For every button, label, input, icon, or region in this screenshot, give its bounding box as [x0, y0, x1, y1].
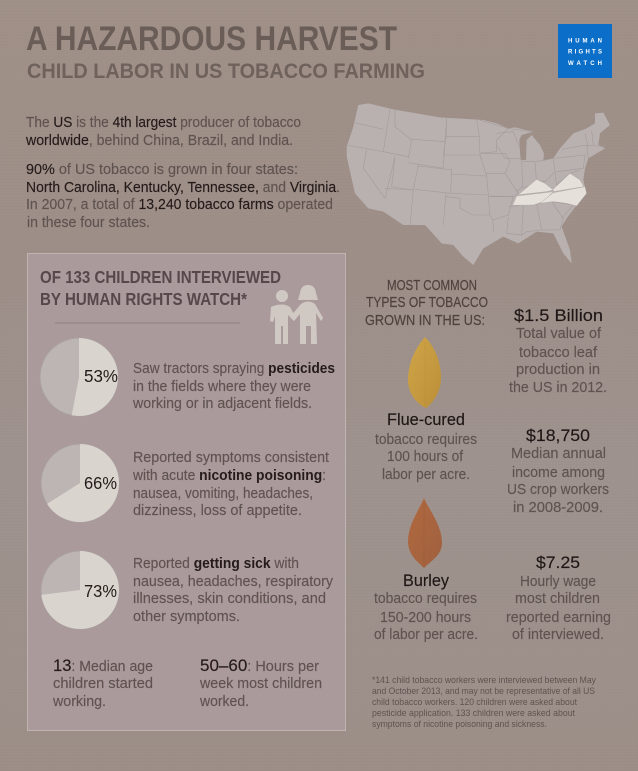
pie chart: 53%: 53%	[84, 366, 118, 386]
heading: tobacco types: TYPES OF TOBACCO	[366, 295, 488, 311]
text: flue-cured: tobacco requires	[375, 432, 477, 448]
stat: hours per week: week most children	[199, 676, 322, 692]
stat: hourly wage: $7.25	[536, 553, 580, 572]
stat: total value: $1.5 Billion	[514, 306, 603, 325]
footnote: *141 child tobacco workers were interviewed between May	[372, 675, 596, 686]
footnote: pesticide application. 133 children were asked about	[372, 708, 575, 719]
pie chart: 73%: 73%	[84, 581, 117, 601]
subtitle: CHILD LABOR IN US TOBACCO FARMING	[27, 60, 425, 83]
stat: median age: children started	[53, 676, 153, 692]
stat: hours per week: worked.	[199, 694, 249, 710]
text: nicotine poisoning	[132, 450, 329, 519]
stat: median income: income among	[512, 465, 605, 481]
highlighted states: Kentucky, Tennessee, Virginia, North Carolina	[513, 173, 587, 206]
footnote: child tobacco workers. 120 children were asked about	[372, 697, 577, 708]
text: getting sick: illnesses, skin conditions, and	[133, 591, 326, 607]
stat: median income: $18,750	[526, 426, 590, 445]
text: nicotine poisoning: Reported symptoms consistent	[133, 450, 329, 466]
intro text: four states: 90% of US tobacco is grown in four states:	[26, 162, 298, 178]
logo: Human Rights Watch	[558, 24, 612, 78]
text: getting sick: other symptoms.	[133, 609, 240, 625]
text: burley: tobacco requires	[374, 591, 477, 607]
stat: median age: 13: Median age	[53, 656, 153, 675]
stat: total value: production in	[516, 362, 600, 378]
stat: hours per week: 50–60: Hours per	[200, 656, 319, 675]
intro text: four states	[26, 162, 340, 231]
stat: median age: working.	[52, 694, 106, 710]
stat: hourly wage	[506, 553, 611, 643]
panel heading: BY HUMAN RIGHTS WATCH*	[40, 289, 247, 309]
footnote	[372, 675, 596, 730]
intro text: four states: In 2007, a total of 13,240 tobacco farms operated	[26, 197, 333, 213]
intro text: US production rank: The US is the 4th largest producer of tobacco	[26, 115, 301, 131]
text: flue-cured: 100 hours of	[387, 449, 464, 465]
text: flue-cured	[375, 410, 477, 483]
pie chart: 73%	[41, 551, 119, 629]
pie chart: 53%	[40, 338, 118, 416]
stat: hourly wage: reported earning	[506, 610, 611, 626]
stat: median income: Median annual	[511, 446, 606, 462]
stat: total value: the US in 2012.	[509, 380, 607, 396]
icon: burley leaf	[408, 498, 442, 568]
text: burley: Burley	[403, 571, 449, 590]
text: nicotine poisoning: with acute nicotine poisoning:	[132, 468, 326, 484]
logo: Human Rights Watch: WATCH	[568, 61, 602, 67]
heading: tobacco types: GROWN IN THE US:	[365, 313, 485, 329]
logo: Human Rights Watch: RIGHTS	[568, 50, 602, 56]
intro text: four states: North Carolina, Kentucky, Tennessee, and Virginia.	[26, 180, 340, 196]
footnote: symptoms of nicotine poisoning and sickness.	[372, 719, 547, 730]
stat: total value	[509, 306, 607, 396]
text: burley	[374, 571, 478, 643]
stat: median income: in 2008-2009.	[513, 500, 603, 516]
text: burley: of labor per acre.	[374, 627, 478, 643]
heading: tobacco types: MOST COMMON	[387, 278, 477, 294]
stat: median age	[52, 656, 153, 710]
stat: median income	[507, 426, 609, 516]
text: pesticides: working or in adjacent fields.	[132, 396, 312, 412]
footnote: and October 2013, and may not be representative of all US	[372, 686, 595, 697]
stat: median income: US crop workers	[507, 482, 609, 498]
stat: total value: tobacco leaf	[519, 345, 598, 361]
text: flue-cured: Flue-cured	[387, 410, 465, 429]
panel heading	[40, 267, 281, 309]
stat: hours per week	[199, 656, 322, 710]
logo: Human Rights Watch: HUMAN	[568, 38, 602, 44]
stat: hourly wage: of interviewed.	[512, 627, 604, 643]
text: getting sick	[133, 556, 334, 625]
text: pesticides: in the fields where they were	[133, 379, 311, 395]
heading: tobacco types	[365, 278, 488, 329]
stat: hourly wage: most children	[515, 591, 600, 607]
intro text: four states: in these four states.	[27, 215, 150, 231]
icon: two children holding hands	[270, 285, 323, 344]
panel heading: OF 133 CHILDREN INTERVIEWED	[40, 267, 281, 287]
pie chart: 66%	[41, 444, 119, 522]
text: pesticides: Saw tractors spraying pesticides	[133, 361, 335, 377]
text: flue-cured: labor per acre.	[382, 467, 470, 483]
pie chart: 66%: 66%	[84, 473, 117, 493]
text: burley: 150-200 hours	[380, 610, 471, 626]
text: nicotine poisoning: dizziness, loss of appetite.	[133, 503, 302, 519]
icon: flue-cured leaf	[408, 337, 441, 408]
intro text: US production rank	[25, 115, 301, 149]
panel: children interviewed	[28, 254, 346, 730]
title: A HAZARDOUS HARVEST	[26, 20, 397, 58]
text: getting sick: Reported getting sick with	[133, 556, 299, 572]
text: nicotine poisoning: nausea, vomiting, headaches,	[133, 486, 313, 502]
stat: hourly wage: Hourly wage	[520, 574, 596, 590]
text: getting sick: nausea, headaches, respiratory	[133, 574, 334, 590]
text: pesticides	[132, 361, 335, 412]
map: United States with tobacco states highlighted	[347, 103, 610, 265]
intro text: US production rank: worldwide, behind China, Brazil, and India.	[25, 133, 293, 149]
stat: total value: Total value of	[516, 326, 602, 342]
